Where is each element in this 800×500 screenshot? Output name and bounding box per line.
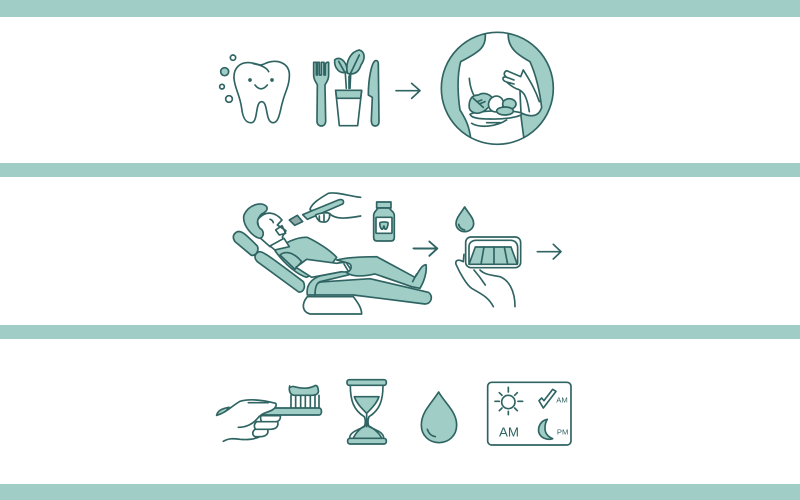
chair base — [303, 297, 362, 314]
icon: glass with leaves — [335, 50, 364, 126]
panel: dental treatment row — [233, 193, 561, 314]
arrow — [537, 244, 561, 259]
chair headrest — [233, 231, 258, 255]
chair seat and footrest — [307, 271, 431, 304]
icon: hand holding toothbrush with paste — [217, 385, 321, 441]
icon: crescent moon — [539, 419, 553, 439]
label: AM: AM — [499, 425, 519, 440]
icon: knife — [368, 61, 379, 126]
hand holding dental applicator — [289, 193, 361, 225]
patient body and shirt — [275, 237, 353, 277]
icon: torso holding a plate of salad in circle — [441, 32, 553, 147]
icon: check mark — [539, 389, 556, 408]
arrow — [414, 241, 437, 256]
label: check AM: AM — [556, 396, 568, 405]
label: PM: PM — [557, 427, 568, 436]
arrow — [396, 83, 420, 98]
illustration: patient reclining in dental chair — [233, 193, 431, 314]
icon: medicine bottle with tooth label — [374, 202, 437, 256]
hand — [456, 254, 515, 307]
icon: water drop — [421, 392, 457, 443]
icon: drop above tray held in hand — [413, 207, 561, 307]
patient head — [244, 204, 289, 250]
icon: fork — [314, 62, 329, 126]
droplet — [456, 207, 474, 232]
chair backrest — [255, 252, 304, 292]
panel: diet row — [220, 32, 553, 147]
panel: brushing routine row — [217, 380, 571, 445]
patient leg and foot — [337, 257, 426, 288]
arrow — [413, 242, 437, 256]
tray — [466, 237, 521, 268]
icon: hourglass — [347, 380, 386, 444]
panel: AM and PM schedule card — [488, 382, 571, 445]
icon: smiling tooth with bubbles — [220, 55, 289, 123]
icon: sun — [495, 387, 523, 415]
